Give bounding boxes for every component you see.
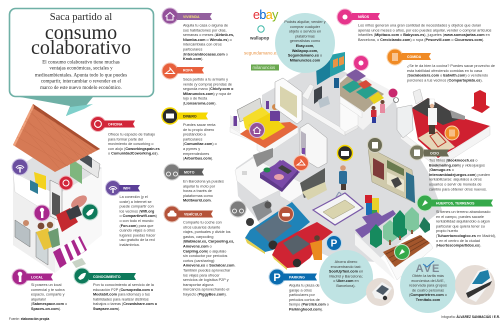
body: La conexión (y el — [120, 195, 148, 199]
body: inalámbrica. — [120, 243, 140, 247]
logo: AVE: AVE — [416, 263, 440, 275]
body: lugares puedas hacer — [120, 233, 156, 237]
body: (Lionsaroma.com). — [183, 102, 217, 106]
callout: AVE: de cuatro personas — [412, 288, 444, 292]
body: educación P2P (Cursopedia.com o — [93, 288, 154, 292]
icon: vehiculo scene — [278, 206, 294, 222]
body: uso gratuito de la red — [120, 238, 155, 242]
source note: Fuente: elaboración propia — [9, 317, 49, 321]
body: intercámbiala con otros — [183, 43, 222, 47]
banner: OFICINA — [108, 122, 123, 126]
panel: wifi — [106, 180, 158, 247]
logo: segundamano: segundamano.es — [244, 50, 279, 56]
body: infantiles (Mipitaco.com o Babyoos.es), juguetes (www.somosjartas.com en — [358, 33, 490, 37]
callout: compraventa: Wallapop.com, — [292, 49, 318, 53]
logo: milanuncios: milanuncios — [252, 65, 275, 70]
body: propio huerto — [436, 229, 458, 233]
body: Bookmaring.com) y videojuegos — [429, 163, 485, 167]
room: clothes — [235, 148, 327, 202]
icon: AVE train — [455, 265, 495, 305]
icon: ocio room — [368, 138, 382, 152]
banner: VIVIENDA — [183, 15, 200, 19]
callout: taxi: Ahorra dinero — [335, 260, 357, 264]
callout: compraventa: Segundamano.es o — [288, 54, 322, 58]
icon: oficina — [90, 116, 106, 132]
icon: huertos — [417, 195, 433, 211]
icon: knowledge house — [82, 204, 98, 220]
callout: taxi: Madrid y Barcelona; — [329, 274, 363, 278]
body — [183, 78, 234, 106]
body — [183, 123, 217, 161]
body: sus habitaciones por días, — [183, 28, 227, 32]
body: (Comunitae.com) o — [183, 142, 217, 146]
title: Saca partido al — [50, 12, 112, 23]
body — [108, 132, 160, 156]
body: Swapsee.com). — [93, 307, 120, 311]
body: (Gamugo.es o — [429, 168, 454, 172]
body: habilidades para realizar distintos — [93, 297, 149, 301]
logo: wallapop: wallapop — [249, 36, 270, 40]
body — [183, 220, 236, 296]
banner: COMIDA — [407, 55, 422, 59]
intro text: ventajas económicas, sociales y — [49, 66, 113, 72]
panel: moto — [164, 164, 224, 203]
panel: comida — [387, 49, 495, 82]
body: Milanuncios.com) y ropa de — [183, 92, 231, 96]
icon: dinero — [162, 108, 178, 124]
body — [93, 283, 158, 311]
title — [31, 12, 131, 59]
body: prestándolo a — [183, 133, 207, 137]
body: periodos cortos de — [289, 298, 320, 302]
callout: AVE: Obtén la tarifa más — [412, 274, 444, 278]
body: trayecto (PiggyBee.com). — [183, 292, 227, 296]
body: rentabilidad alquilándolo a algún — [436, 220, 490, 224]
body: (Arboribus.com). — [183, 157, 213, 161]
callout: AVE — [400, 257, 456, 313]
banner: NIÑOS — [358, 14, 370, 19]
icon: ropa — [162, 63, 178, 79]
callout: compraventa: Milanuncios.com — [290, 58, 321, 62]
body — [31, 283, 67, 311]
callout: compraventa: comprar cualquier — [290, 25, 321, 29]
body: (Tuhuertoecologico.es en Madrid), — [436, 234, 496, 238]
callout: taxi: o Uber.com en — [333, 279, 359, 283]
body: lujo o de fiesta — [183, 97, 208, 101]
body: Alquila tu plaza de — [289, 284, 320, 288]
wardrobe beige — [275, 78, 302, 124]
panel: local — [12, 269, 67, 311]
panel: parking — [269, 269, 329, 312]
body: garaje a otros — [289, 288, 312, 292]
banner: PARKING — [289, 275, 305, 279]
icon: wifi — [106, 180, 120, 196]
room: blue wardrobe — [316, 52, 345, 88]
body: tiempo (Parclick.com o — [289, 303, 329, 307]
icon: ninos — [337, 9, 353, 25]
illustration: coworking house — [13, 104, 102, 273]
panel: ninos — [337, 9, 492, 42]
callout: taxi: encuentrando taxi: — [331, 265, 361, 269]
callout: compraventa: objeto o servicio en — [289, 30, 321, 34]
icon: parking scene: P — [331, 238, 338, 250]
body: Saca partido a tu armario y — [183, 78, 228, 82]
body: Meetabit.com para idiomas) o tus — [93, 293, 150, 297]
body — [183, 180, 224, 203]
body: segunda mano (Chicfy.com o — [183, 87, 234, 91]
illustration: central floor and rooms — [230, 52, 490, 262]
icon: vivienda room — [250, 122, 264, 138]
body — [358, 24, 492, 42]
body — [120, 195, 158, 247]
body: los vecinos (Wifi.org — [120, 209, 155, 213]
body — [407, 64, 495, 82]
callout: AVE: Trenitalo.com — [416, 298, 441, 302]
callout: taxi: Barcelona). — [336, 284, 356, 288]
body: alquilar tu moto por — [183, 184, 216, 188]
body: (Huertoscompartidos.es). — [436, 244, 481, 248]
body: (Socialeaters.com o Eatwith.com) o vendiendo — [407, 74, 488, 78]
intro text — [35, 60, 127, 91]
body: particulares — [183, 48, 203, 52]
body: plataformas como — [183, 194, 213, 198]
panel: conocimiento — [74, 268, 158, 311]
banner: LOCAL — [31, 275, 44, 279]
body: los viajes para ofrecer — [183, 273, 220, 277]
callout: compraventa: generalistas como — [290, 39, 320, 43]
logo: milanuncios — [251, 64, 279, 70]
body: cambio para obtener otros nuevos. — [429, 187, 487, 191]
body: Puedes sacar renta — [183, 123, 216, 127]
callout: AVE: reservada para grupos — [409, 284, 447, 288]
body: Pon tu conocimiento al servicio de la — [93, 283, 155, 287]
body: con alojo (Coworkingspain.es — [108, 147, 160, 151]
callout: AVE: (Compartetren.com o — [409, 293, 447, 297]
roof — [13, 104, 100, 172]
body: (Fon.com) para que — [120, 224, 153, 228]
body: espacio, comparte y — [31, 293, 65, 297]
body: Comparte tu coche con — [183, 220, 222, 224]
body: porciones a tus vecinos (Compartoplato.es). — [407, 78, 483, 82]
icon: vehiculo — [164, 206, 180, 222]
icon: ropa room — [294, 156, 308, 170]
icon: wifi house — [12, 159, 28, 175]
body: en el campo, puedes sacarle — [436, 215, 484, 219]
room: bedroom — [230, 78, 327, 168]
icon: huertos scene — [394, 244, 410, 260]
body: alquílalo! — [31, 297, 46, 301]
icon: ocio — [410, 145, 424, 160]
body: Carpling.com) o alquílalo — [183, 249, 226, 253]
body — [436, 210, 496, 248]
body: Si posees un local — [31, 283, 62, 287]
body: o ComunidadCoworking.es). — [108, 152, 159, 156]
body: Ofrece tu espacio de trabajo — [108, 132, 155, 136]
body: sin conductor por períodos — [183, 254, 228, 258]
callout: AVE: económica del AVE, — [411, 279, 445, 283]
credit: Infografía: ÁLVAREZ SANMACIÁS / E.R. — [441, 314, 500, 319]
icon: office house — [59, 176, 73, 190]
body: Amovens.es o Socialcar.com. — [183, 264, 236, 268]
icon: comida room — [445, 126, 459, 140]
body — [289, 284, 329, 312]
banner: OCIO — [430, 151, 439, 155]
body: otros usuarios durante — [183, 225, 220, 229]
wardrobe white — [300, 123, 327, 168]
banner: WIFI — [123, 187, 130, 191]
body: (Intercambiocasas.com o — [183, 52, 228, 56]
room: upper corridor walls — [302, 84, 358, 136]
moto illustration — [246, 200, 272, 226]
icon: local — [12, 269, 28, 285]
body: usuarios o servir de moneda de — [429, 182, 482, 186]
panel: vehiculo — [164, 206, 236, 296]
body: cortos (carsharing): — [183, 259, 215, 263]
body: Motitworld.com. — [183, 199, 212, 203]
body: Alquila tu casa o alguna de — [183, 24, 228, 28]
body: particular que quiera tener su — [436, 224, 485, 228]
intro text: medioambientales. Apunta todo lo que puedes — [35, 74, 127, 78]
body: movimiento de coworking o — [108, 142, 153, 146]
callout: compraventa: Podrás alquilar, vender y — [284, 20, 326, 24]
body: particulares por — [289, 293, 316, 297]
room: ocio shelves — [368, 147, 415, 203]
icon: moto scene — [230, 201, 246, 217]
body: Spaces-on.com). — [31, 307, 61, 311]
body: para formar parte del — [108, 137, 143, 141]
body: servicios de logística P2P y — [183, 278, 229, 282]
body: (Blablacar.es, Carpooling.es, — [183, 240, 234, 244]
awning — [53, 236, 87, 268]
illustration: garden — [355, 207, 433, 280]
banner: DINERO — [183, 114, 197, 118]
body: comercial y te sobra — [31, 288, 65, 292]
banner: VEHÍCULO — [184, 211, 202, 216]
icon: conocimiento — [74, 268, 90, 284]
body: semanas o meses (Airbnb.es, — [183, 33, 234, 37]
body: de tu propio dinero — [183, 128, 214, 132]
body: transportar alguna — [183, 283, 214, 287]
intro text: marco de este nuevo modelo económico. — [40, 86, 122, 91]
body: cuando viajes a otros — [120, 229, 155, 233]
body: esta habilidad ofreciendo comidas en tu casa — [407, 69, 483, 73]
body: Barcelona, o Creciclando.com) o ropa (Pescevill.com o Cicuenzos.com). — [358, 38, 484, 42]
body: horas a través de — [183, 189, 212, 193]
icon: parking: P — [273, 272, 281, 284]
title: consumo — [45, 22, 117, 44]
body: puede compartir con — [120, 205, 154, 209]
body: Niumba.com o Wimdu.es) o — [183, 38, 232, 42]
body: gastos, carpooling — [183, 235, 213, 239]
callout: taxi — [319, 250, 373, 304]
body: ¿Se te da bien la cocina? Puedes sacar provecho de — [407, 64, 495, 68]
icon: ninos room — [354, 56, 368, 70]
banner: ROPA — [183, 69, 193, 73]
body: En Barcelona ya puedes — [183, 180, 224, 184]
banner: MOTO — [184, 170, 195, 174]
icon: local house — [34, 205, 50, 221]
logo: wallapop — [249, 26, 270, 40]
illustration: red car — [272, 222, 333, 270]
title: colaborativo — [31, 37, 131, 59]
icon: vivienda — [162, 8, 178, 24]
banner — [352, 13, 380, 20]
body: coste) a Internet se — [120, 200, 152, 204]
body: Amovens.com o — [183, 244, 212, 248]
body: rentabilizarse: alquílalos a otros — [429, 178, 482, 182]
panel: ropa — [162, 63, 234, 106]
banner: HUERTOS, TERRENOS — [436, 201, 475, 205]
logo: ebay: ebay — [253, 8, 279, 22]
icon: dinero scene — [338, 146, 352, 160]
room: kids — [340, 69, 398, 132]
title panel — [10, 8, 154, 96]
callout tail — [20, 97, 93, 116]
body: También puedes aprovechar — [183, 268, 231, 272]
body: apenas unos meses o años, por eso puedes alquilar, vender o comprar artículos — [358, 28, 492, 32]
body: Los niños generan una gran cantidad de necesidades y objetos que duran — [358, 24, 481, 28]
icon: moto — [164, 164, 180, 180]
icon: parking scene — [326, 236, 342, 250]
person: dinero — [339, 165, 347, 190]
callout: compraventa: Ebay.com, — [296, 44, 314, 48]
callout: taxi: SoolUpTaxi.com en — [329, 270, 363, 274]
body: Intercambiadejuegos.com) pueden — [429, 173, 490, 177]
callout: compraventa — [275, 13, 335, 73]
body: particulares — [183, 137, 203, 141]
body: o en el centro de la ciudad — [436, 239, 480, 243]
body: vende (y compra) prendas de — [183, 82, 232, 86]
body: viajes, puntuales y divide los — [183, 230, 231, 234]
panel: oficina — [90, 116, 160, 156]
intro text: El consumo colaborativo tiene muchas — [42, 60, 120, 66]
body: (Sabmespace.com o — [31, 302, 67, 306]
callout: compraventa: plataformas — [295, 34, 315, 38]
body — [183, 24, 234, 61]
body: Knok.com). — [183, 57, 203, 61]
body: Parkinghood.com). — [289, 308, 323, 312]
body: mercancía aprovechando el — [183, 288, 229, 292]
panel: vivienda — [162, 8, 234, 61]
body: a pymes y — [183, 147, 200, 151]
intro text: compartir, intercambiar o revender en el — [41, 80, 122, 84]
body: emprendedores — [183, 152, 209, 156]
body: Si tienes un terreno abandonado — [436, 210, 490, 214]
icon: taxi car — [366, 278, 394, 306]
body: o con todo el mundo — [120, 219, 153, 223]
panel: ocio — [410, 145, 490, 191]
room: kitchen — [397, 89, 490, 168]
body: Tus libros (Bookmooch.es o — [429, 158, 477, 162]
icon: comida — [387, 49, 403, 65]
body: trabajos o tareas (Crowdshare.com o — [93, 302, 158, 306]
banner: CONOCIMIENTO — [93, 275, 121, 279]
body — [429, 158, 490, 191]
body: o Compartirwifi.com) — [120, 214, 158, 218]
panel: dinero — [162, 108, 217, 161]
room: living — [313, 192, 396, 238]
illustration: blue car — [245, 202, 310, 254]
panel: huertos — [417, 195, 496, 248]
